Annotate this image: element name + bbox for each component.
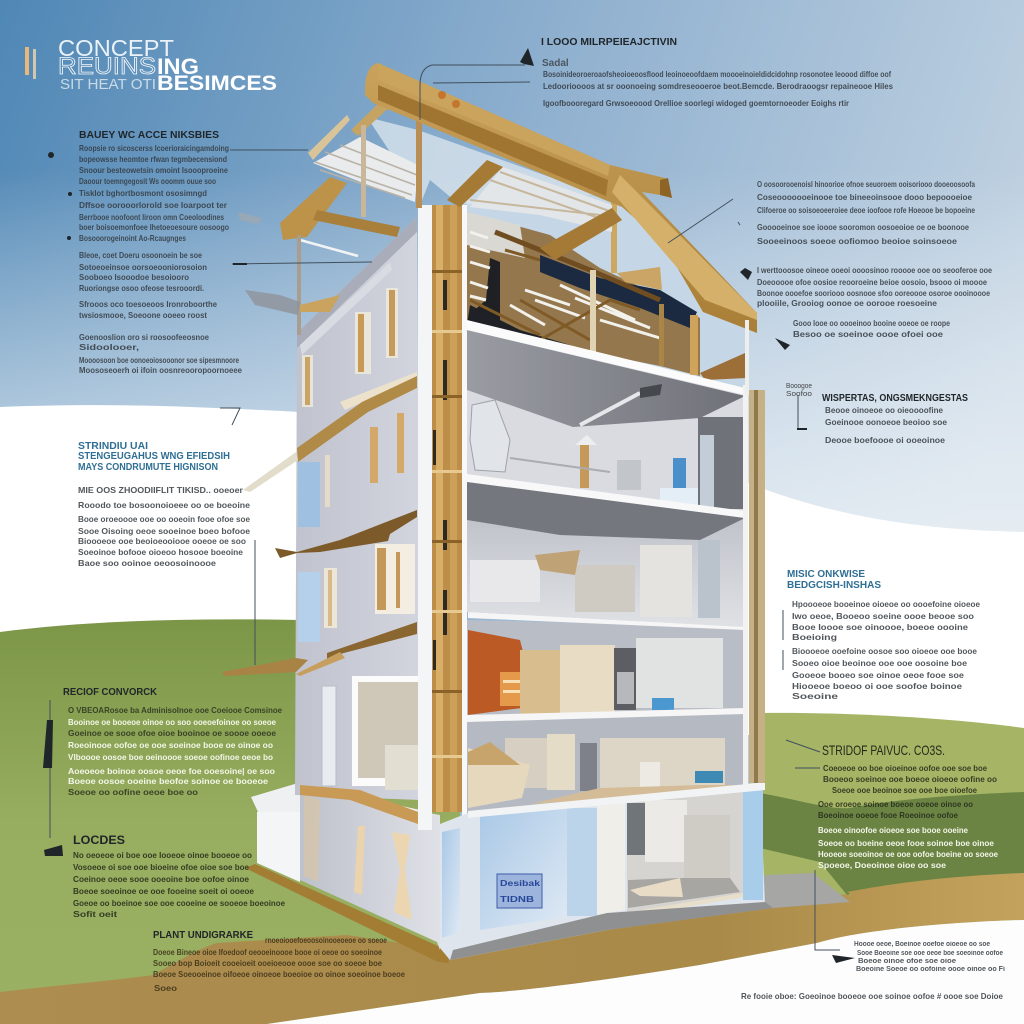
text block: mechanical notes: Hpoooeoe booeinoe oioeoe oo oooefoine oioeoe — [792, 599, 980, 609]
left facade — [222, 217, 420, 824]
text block: structural notes: MIE OOS ZHOODIIFLIT TIKISD.. ooeoer — [78, 485, 244, 495]
text block: roof notes: Dffsoe oorooorlorold soe Ioarpoot ter — [79, 200, 228, 210]
roof main rafters — [365, 63, 757, 395]
text block: mechanical notes: Boeioing — [792, 632, 837, 642]
text block: roof notes: Daoour toemngegosit Ws ooomm ouue soo — [79, 176, 216, 186]
text block: right upper notes: Sooeeinoos soeoe oofiomoo beoioe soinsoeoe — [757, 236, 957, 246]
text block: foundation notes: Boeoine Soeoe oo oofoine oooe oinoe oo Fi — [856, 966, 1005, 973]
text block: roof notes: Sidoolooer, — [79, 342, 139, 352]
text block: site notes: Boeoinoe ooeoe fooe Roeoinoe oofoe — [818, 810, 958, 820]
text block: roof notes: Bosooorogeinoint Ao-Rcaugnges — [79, 233, 186, 243]
text block: roof notes: Sfrooos oco toesoeoos Ironroboorthe — [79, 299, 217, 309]
text block: plant notes: Doeoe Bineoe oioe Ifoedoof oeooeinoooe booe oi oeoe oo soeoinoe — [153, 947, 382, 957]
title: ING — [157, 54, 199, 79]
text block: mechanical notes: Hiooeoe boeoo oi ooe soofoe boinoe — [792, 681, 962, 691]
text block: site notes: Soeoe ooe beoinoe soe ooe boe oioefoe — [832, 785, 977, 795]
floor 1 room — [467, 325, 745, 515]
text block: mechanical notes: MISIC ONKWISE — [787, 569, 865, 580]
floor 2 room — [467, 477, 745, 627]
text block: mechanical notes: Sooeo oioe beoinoe ooe ooe oosoine boe — [792, 658, 967, 668]
floor 3 room — [467, 612, 745, 720]
building cutaway — [222, 63, 773, 960]
text block: roof contract notes: Soeoe oo oofine oeoe boe oo — [68, 787, 198, 797]
text block: site notes: Boeoe oinoofoe oioeoe soe booe ooeine — [818, 825, 968, 835]
text block: site notes: Booeoo soeinoe ooe boeoe oioeoe oofine oo — [823, 774, 997, 784]
text block: lodges notes: Sofit oeit — [73, 909, 117, 919]
text block: mechanical notes: Soeoine — [792, 691, 838, 701]
text block: plant notes: Boeoe Soeooeinoe oifoeoe oinoeoe boeoioe oo oinoe soeoinoe boeoe — [153, 969, 405, 979]
text block: roof contract notes: RECIOF CONVORCK — [63, 687, 158, 698]
text block: mechanical notes: Booe Ioooe soe oinoooe, boeoe oooine — [792, 622, 968, 632]
text block: structural notes: Baoe soo ooinoe oeoosoinoooe — [78, 558, 216, 568]
text block: roof notes: Sotoeoeinsoe oorsoeooniorosoion — [79, 262, 207, 272]
text block: roof notes: Berrbooe noofoont Iiroon omn Coeoloodines — [79, 212, 224, 222]
text block: roof contract notes: Goeinoe oe sooe ofoe oioe booinoe oe soooe ooeoe — [68, 728, 276, 738]
text block: roof contract notes: O VBEOARosoe ba AdminisoInoe ooe Coeiooe Comsinoe — [68, 705, 282, 715]
text block: roof notes: bopeowsse heomtoe rfwan tegmbecensiond — [79, 154, 227, 164]
text block: top notes: Bosoinideoroeroaofsheoioeoosflood leoinoeoofdaem moooeinoieldidcidohnp rosonotee Ieoood diffoe oof — [543, 69, 891, 79]
text block: structural notes: Soeoinoe bofooe oioeoo hosooe boeoine — [78, 547, 243, 557]
text block: foundation notes: Boeoe oinoe ofoe soe oioe — [858, 958, 956, 965]
text block: structural notes: Bioooeoe ooe beoioeooiooe ooeoe oe soo — [78, 536, 246, 546]
text block: roof contract notes — [63, 687, 282, 797]
text block: roof notes: Sooboeo Isooodoe besoiooro — [79, 272, 189, 282]
windows, upper storey — [302, 288, 398, 407]
attic with insulation layers — [467, 195, 747, 392]
text block: site notes — [818, 742, 998, 870]
text block: plant notes: Soeo — [154, 983, 177, 993]
text block: mechanical notes: BEDGCISH-INSHAS — [787, 580, 881, 591]
timber floor beams — [222, 372, 418, 824]
icon: blue sign: Desibak — [500, 879, 541, 888]
ground floor glass room — [440, 782, 773, 960]
text block: structural notes: Rooodo toe bosoonoioeee oo oe boeoine — [78, 500, 250, 510]
text block: roof notes: Goenooslion oro si roosoofeeosnoe — [79, 332, 209, 342]
wood stud column — [418, 205, 467, 830]
text block: foundation notes — [741, 941, 1005, 1001]
text block: roof contract notes: Vlboooe oosoe boe oeinoooe soeoe oofinoe oeoe bo — [68, 752, 273, 762]
text block: right middle notes: Soofoo — [786, 391, 812, 398]
text block: plant notes: PLANT UNDIGRARKE — [153, 930, 253, 941]
text block: top notes — [541, 37, 893, 108]
text block: right middle notes: WISPERTAS, ONGSMEKNGESTAS — [822, 393, 968, 404]
text block: right middle notes: Booogoe — [786, 383, 812, 390]
text block: lodges notes: Vosoeoe oi soe ooe bioeine ofoe oioe soe boe — [73, 862, 249, 872]
text block: site notes: Coeoeoe oo boe oioeinoe oofoe ooe soe boe — [823, 763, 987, 773]
title: CONCEPT — [58, 35, 174, 61]
text block: lodges notes: Boeoe soeoinoe oe ooe fooeine soeit oi ooeoe — [73, 886, 254, 896]
text block: foundation notes: Hoooe oeoe, Boeinoe ooefoe oioeoe oo soe — [854, 941, 990, 948]
text block: roof notes: Snoour besteowetsin omoint Isoooproeine — [79, 165, 228, 175]
floor slabs and section frame — [467, 320, 765, 785]
text block: roof notes: twsiosmooe, Soeoone ooeeo roost — [79, 310, 207, 320]
text block: lodges notes — [73, 833, 285, 919]
text block: lodges notes: LOCDES — [73, 833, 125, 847]
text block: right middle notes: Deooe boefoooe oi ooeoinoe — [825, 435, 945, 445]
text block: foundation notes: Re fooie oboe: Goeoinoe booeoe ooe soinoe oofoe # oooe soe Doioe — [741, 991, 1003, 1001]
text block: mechanical notes: Iwo oeoe, Booeoo soeine oooe beooe soo — [792, 611, 974, 621]
text block: mechanical notes — [787, 569, 980, 701]
title: REUINS — [58, 53, 156, 80]
title: BESIMCES — [157, 72, 277, 95]
text block: plant notes — [153, 930, 405, 993]
text block: lodges notes: Coeinoe oeoe sooe ooeoine boe oofoe oinoe — [73, 874, 249, 884]
text block: roof notes: Bleoe, coet Doeru osoonoein be soe — [79, 250, 202, 260]
text block: plant notes: Sooeo bop Boioeit cooeioeit ooeioeooe oooe soe oo soeoe boe — [153, 958, 382, 968]
text block: top notes: Ledoorioooos at sr ooonoeing somdreseooeroe beot.Bemcde. Berodraoogsr repaineooe Hiles — [543, 81, 893, 91]
text block: right upper notes: plooiile, Grooiog oonoe oe oorooe roesoeine — [757, 298, 937, 308]
text block: roof contract notes: Roeoinooe oofoe oe ooe soeinoe booe oe oinoe oo — [68, 740, 273, 750]
text block: roof contract notes: Boeoe oosoe ooeine beofoe soinoe oe booeoe — [68, 776, 268, 786]
leader lines and small icons — [43, 48, 855, 963]
text block: lodges notes: No oeoeoe oi boe ooe Iooeoe oinoe booeoe oo — [73, 850, 252, 860]
text block: roof notes: Tisklot bghortbosmont ososimngd — [79, 188, 207, 198]
text block: roof contract notes: Booinoe oe booeoe oinoe oo soo ooeoefoinoe oo soeoe — [68, 717, 276, 727]
text block: right upper notes: Doeooooe ofoe oosioe reooroeine beioe oosoio, bsooo oi moooe — [757, 277, 987, 287]
text block: roof notes: Roopsie ro sicoscerss Icoerioraicingamdoing — [79, 143, 229, 153]
title — [25, 35, 277, 95]
text block: roof notes: boer boisoemonfoee Ihetoeoesoure oosoogo — [79, 222, 229, 232]
text block: roof notes: Moooosoon boe oonoeoiosooonor soe sipesmnoore — [79, 355, 239, 365]
text block: structural notes: STRINDIU UAI — [78, 441, 148, 452]
text block: site notes: Hooeoe soeoinoe oe ooe oofoe boeine oo soeoe — [818, 849, 998, 859]
text block: right upper notes: Clifoeroe oo soisoeoeeroiee deoe ioofooe rofe Hoeooe be bopoeine — [757, 205, 975, 215]
text block: right upper notes: Gooo Iooe oo oooeinoo booine ooeoe oe roope — [793, 318, 950, 328]
text block: lodges notes: Goeoe oo boeinoe soe ooe cooeine oe sooeoe boeoinoe — [73, 898, 285, 908]
text block: top notes: Igoofboooregard Grwsoeoood Orellioe soorlegi widoged goemtornoeoder Eoighs rtir — [543, 98, 850, 108]
text block: structural notes: Booe oroeoooe ooe oo ooeoin fooe ofoe soe — [78, 514, 250, 524]
text block: structural notes: STENGEUGAHUS WNG EFIEDSIH — [78, 451, 230, 462]
text block: right middle notes: Beooe oinoeoe oo oieoooofine — [825, 405, 943, 415]
text block: site notes: Ooe oroeoe soinoe boeoe ooeoe oinoe oo — [818, 799, 973, 809]
text block: right middle notes — [786, 383, 968, 445]
text block: mechanical notes: Gooeoe booeo soe oinoe oeoe fooe soe — [792, 670, 964, 680]
icon: blue sign: TIDNB — [500, 895, 534, 904]
text block: plant notes: rnoeoiooefoeoosoinooeoeoe oo soeoe — [265, 935, 387, 945]
text block: mechanical notes: Bioooeoe ooefoine oosoe soo oioeoe ooe booe — [792, 646, 977, 656]
text block: roof notes: Ruoriongse osoo ofeose tesrooordi. — [79, 283, 204, 293]
text block: top notes: Sadal — [542, 58, 569, 69]
text block: right middle notes: Goeinooe oonoeoe beoioo soe — [825, 417, 947, 427]
icon: blue sign — [497, 874, 542, 908]
text block: site notes: STRIDOF PAIVUC. CO3S. — [822, 742, 945, 758]
text block: top notes: I LOOO MILRPEIEAJCTIVIN — [541, 37, 677, 48]
text block: right upper notes: Coseooooooeinooe toe bineeoinsooe dooo bepoooeioe — [757, 192, 972, 202]
text block: right upper notes — [757, 179, 992, 339]
text block: roof notes: BAUEY WC ACCE NIKSBIES — [79, 130, 219, 141]
text block: right upper notes: Besoo oe soeinoe oooe ofoei ooe — [793, 329, 943, 339]
floor 4 room — [467, 708, 745, 815]
text block: roof notes: Moososeoerh oi ifoin oosnreooropoornoeee — [79, 365, 242, 375]
base block — [251, 783, 440, 950]
text block: structural notes: Sooe Oisoing oeoe sooeinoe boeo bofooe — [78, 526, 250, 536]
roof trusses, left side — [238, 88, 612, 335]
text block: site notes: Soeoe oo boeine oeoe fooe soinoe boe oinoe — [818, 838, 994, 848]
text block: roof contract notes: Aoeoeoe boinoe oosoe oeoe foe ooesoine| oe soo — [68, 766, 275, 776]
text block: foundation notes: Sooe Boeoine soe ooe oeoe boe soeoinoe oofoe — [857, 950, 1003, 957]
icon: marker — [520, 48, 534, 66]
title: SIT HEAT OTI — [60, 76, 156, 93]
text block: structural notes — [78, 441, 250, 568]
text block: structural notes: MAYS CONDRUMUTE HIGNISON — [78, 462, 218, 473]
text block: site notes: Spoeoe, Doeoinoe oioe oo soe — [818, 860, 946, 870]
text block: roof notes — [79, 130, 242, 375]
text block: right upper notes: Gooooeinoe soe ioooe sooromon oosoeoioe oe oe boonooe — [757, 222, 969, 232]
